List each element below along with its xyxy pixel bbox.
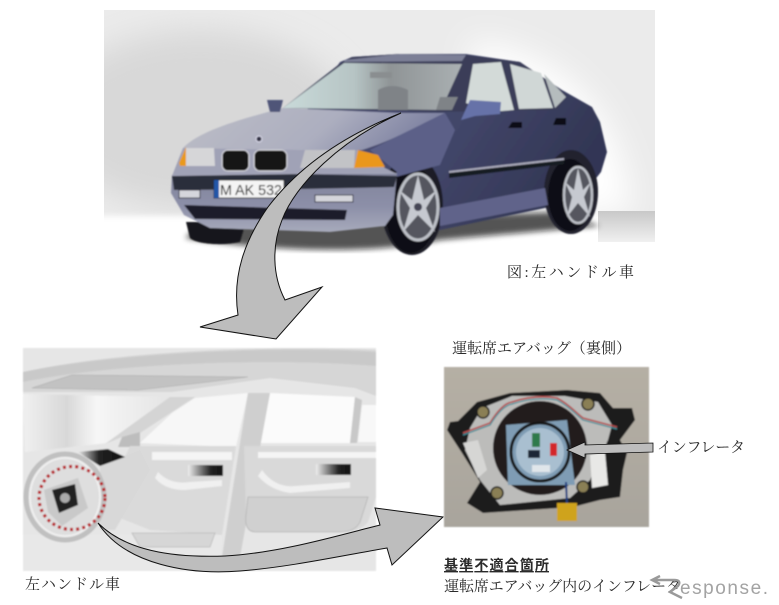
armrest front <box>155 472 222 490</box>
armrest rear <box>258 470 350 493</box>
moulding highlight <box>449 158 564 173</box>
front window <box>140 393 248 447</box>
seat rail lines <box>132 533 215 547</box>
red part <box>550 443 557 456</box>
green part <box>532 433 540 447</box>
wiring <box>463 397 617 433</box>
note: inflator inside driver airbag: 運転席エアバッグ内のインフレータ <box>444 577 681 595</box>
blue plate <box>506 420 575 485</box>
front door panel <box>100 446 236 535</box>
door mirror <box>461 100 501 120</box>
hood <box>183 108 445 156</box>
pointer arrow to inflator <box>567 442 653 458</box>
centre pillar <box>222 393 270 557</box>
floor <box>23 535 222 571</box>
dark part <box>528 450 540 458</box>
rear wheel arch <box>544 150 598 234</box>
caption: driver airbag (rear side): 運転席エアバッグ（裏側） <box>452 339 631 357</box>
lower intake <box>184 205 347 220</box>
interior illustration <box>23 348 376 571</box>
rear door panel <box>244 446 376 532</box>
wheel hub area <box>44 478 88 526</box>
airbag hub <box>52 484 78 513</box>
front bumper <box>171 168 397 232</box>
watermark: Response <box>652 576 768 599</box>
dashboard <box>100 450 150 530</box>
front alloy wheel <box>398 174 438 240</box>
front tyre <box>385 165 437 253</box>
nose panel <box>172 148 397 176</box>
roof highlight <box>344 54 466 62</box>
sun visor <box>32 375 248 390</box>
roof band <box>23 348 376 396</box>
caption: left-hand drive car figure: 図:左ハンドル車 <box>507 263 634 281</box>
photo backdrop <box>104 10 655 242</box>
rear alloy wheel <box>564 167 592 223</box>
door handle recesses <box>188 464 351 476</box>
dashboard vent <box>78 449 125 466</box>
silver plate <box>465 396 612 505</box>
second side window <box>510 64 553 109</box>
tyres <box>186 222 246 244</box>
roof and window surround <box>283 54 566 112</box>
left headlight <box>179 147 215 166</box>
caption: left-hand drive: 左ハンドル車 <box>25 575 120 593</box>
side moulding <box>449 159 564 178</box>
right sticker <box>590 452 608 488</box>
sill <box>440 188 548 226</box>
steering wheel <box>26 454 104 540</box>
left mirror <box>267 100 283 112</box>
curved arrow: car to interior <box>200 113 401 339</box>
A pillar <box>105 397 195 444</box>
ground shadow <box>185 212 600 250</box>
third side window <box>544 74 566 108</box>
car photo <box>104 10 655 256</box>
wheel rim highlight <box>30 458 100 536</box>
right headlight <box>300 150 385 168</box>
number plate: M AK 532 <box>220 182 282 199</box>
rear view mirror and sun visor <box>370 72 392 78</box>
badge <box>256 136 262 142</box>
inflator ring <box>511 423 569 481</box>
car illustration <box>171 54 607 255</box>
label on disc <box>532 465 550 472</box>
bolts <box>477 398 594 499</box>
door handles <box>508 118 566 128</box>
roof highlight <box>23 350 376 382</box>
grille <box>222 150 287 171</box>
mirror base <box>118 432 140 447</box>
connector wire <box>566 482 567 505</box>
red dotted circle <box>39 466 105 530</box>
interior base <box>23 348 376 571</box>
watermark wordmark: esponse. <box>680 578 768 599</box>
fog lights <box>179 190 353 202</box>
rear tyre <box>548 159 592 231</box>
curved arrow: interior to airbag <box>98 508 443 572</box>
side windows <box>466 62 514 112</box>
inflator disc <box>516 428 564 476</box>
body side <box>300 54 607 232</box>
airbag photo <box>444 367 649 527</box>
windshield <box>283 63 462 110</box>
rear window <box>260 393 355 443</box>
rear pillar <box>350 397 362 443</box>
watermark R mark <box>652 576 682 598</box>
quarter window <box>358 405 376 442</box>
label: inflator: インフレータ <box>657 439 745 456</box>
seats seen through glass <box>378 86 458 110</box>
photo background <box>444 367 649 527</box>
front wheel arch <box>381 155 443 255</box>
rear pocket <box>246 497 368 532</box>
bumper dark strip <box>172 174 397 190</box>
windscreen <box>23 394 170 452</box>
left sticker <box>463 440 487 478</box>
door sill bands <box>152 452 376 460</box>
black frame <box>447 390 635 513</box>
fender highlight <box>370 113 455 178</box>
dark recess <box>493 401 587 495</box>
second wire <box>463 399 617 435</box>
heading: non-conforming part: 基準不適合箇所 <box>444 557 549 573</box>
hub badge <box>60 493 70 503</box>
yellow connector <box>557 503 577 521</box>
